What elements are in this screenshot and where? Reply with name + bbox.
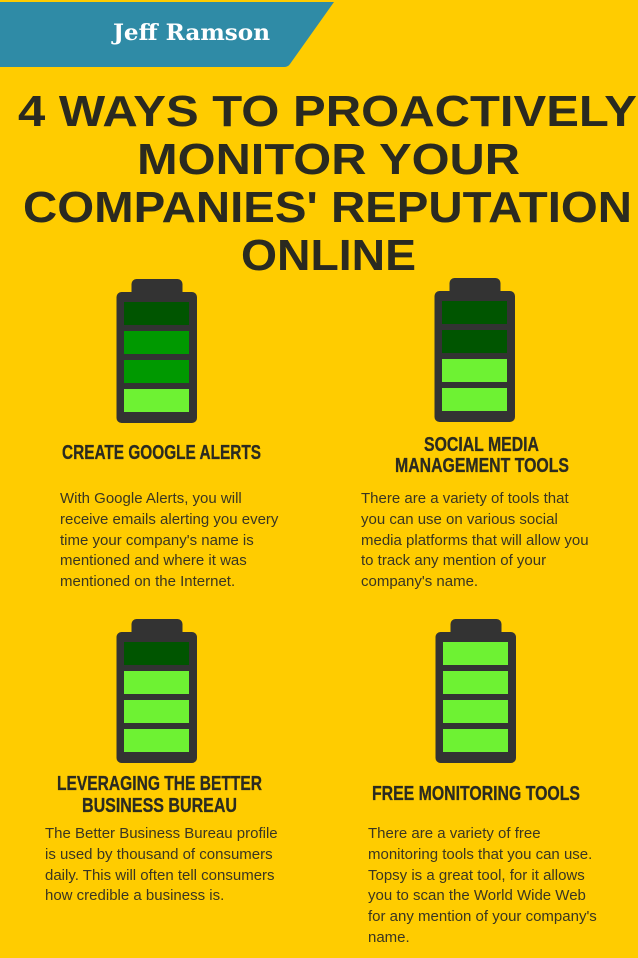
text: free monitoring tools: you to scan the World Wide Web bbox=[368, 887, 586, 904]
heading: better business bureau bbox=[57, 773, 262, 817]
text: google alerts: mentioned and where it was bbox=[60, 552, 247, 569]
icon: battery 1 bbox=[116, 279, 197, 423]
text: better business bureau: daily. This will often tell consumers bbox=[45, 867, 275, 884]
banner name: Jeff Ramson bbox=[111, 20, 270, 46]
text: free monitoring tools: Topsy is a great tool, for it allows bbox=[368, 867, 585, 884]
text: free monitoring tools bbox=[368, 825, 597, 946]
heading: free monitoring tools: FREE MONITORING TOOLS bbox=[372, 783, 580, 805]
text: google alerts: time your company's name is bbox=[60, 532, 254, 549]
text: social media tools: to track any mention of your bbox=[361, 552, 546, 569]
heading: better business bureau: BUSINESS BUREAU bbox=[82, 795, 237, 817]
heading: social media management tools: SOCIAL MEDIA bbox=[424, 434, 539, 456]
banner bbox=[0, 2, 334, 67]
text: free monitoring tools: There are a variety of free bbox=[368, 825, 541, 842]
title: 4 WAYS TO PROACTIVELY bbox=[18, 87, 637, 136]
text: social media tools: company's name. bbox=[361, 573, 478, 590]
title: COMPANIES' REPUTATION bbox=[23, 183, 632, 232]
text: free monitoring tools: for any mention of your company's bbox=[368, 908, 597, 925]
icon: battery 3 bbox=[116, 619, 197, 763]
heading: social media management tools bbox=[395, 434, 569, 477]
title: ONLINE bbox=[241, 231, 416, 280]
heading: social media management tools: MANAGEMENT TOOLS bbox=[395, 455, 569, 477]
text: social media tools: you can use on various social bbox=[361, 511, 558, 528]
text: google alerts: mentioned on the Internet. bbox=[60, 573, 235, 590]
text: google alerts: With Google Alerts, you will bbox=[60, 490, 242, 507]
title: MONITOR YOUR bbox=[137, 135, 520, 184]
text: google alerts bbox=[60, 490, 279, 590]
text: free monitoring tools: monitoring tools that you can use. bbox=[368, 846, 592, 863]
text: social media tools: media platforms that will allow you bbox=[361, 532, 589, 549]
text: better business bureau: The Better Business Bureau profile bbox=[45, 825, 278, 842]
text: better business bureau bbox=[45, 825, 278, 904]
text: better business bureau: is used by thousand of consumers bbox=[45, 846, 273, 863]
heading: create google alerts: CREATE GOOGLE ALERTS bbox=[62, 442, 261, 464]
text: social media tools bbox=[361, 490, 589, 590]
text: better business bureau: how credible a business is. bbox=[45, 887, 224, 904]
icon: battery 2 bbox=[434, 278, 515, 422]
text: social media tools: There are a variety of tools that bbox=[361, 490, 569, 507]
icon: battery 4 bbox=[436, 619, 516, 763]
text: free monitoring tools: name. bbox=[368, 929, 410, 946]
heading: better business bureau: LEVERAGING THE BETTER bbox=[57, 773, 262, 795]
title bbox=[18, 87, 637, 280]
text: google alerts: receive emails alerting you every bbox=[60, 511, 279, 528]
